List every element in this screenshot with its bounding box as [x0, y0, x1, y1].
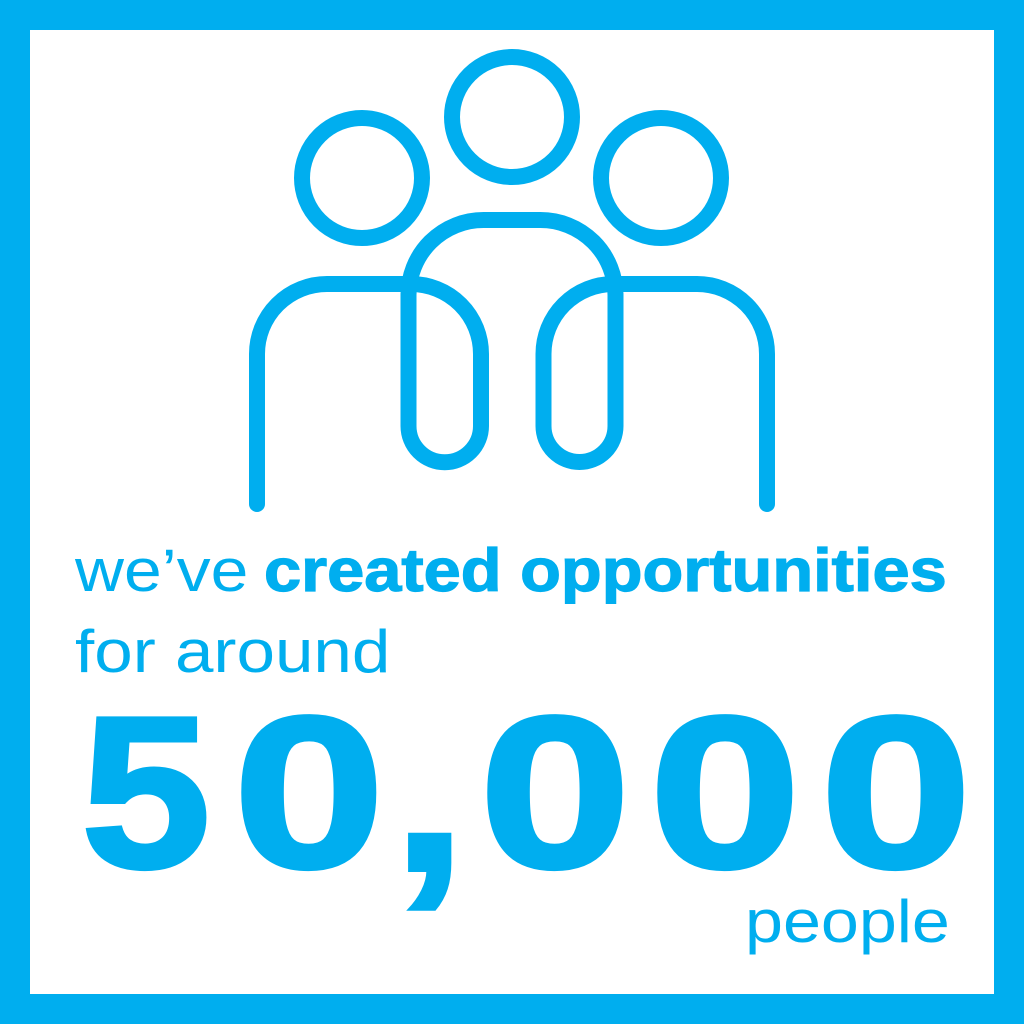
body: centre person [408, 220, 616, 295]
head: centre person [452, 57, 572, 177]
text: we've: we’ve [75, 537, 248, 604]
text: 50,000: 0 [232, 670, 384, 912]
text: for around: for around [75, 618, 390, 685]
text: created opportunities: created opportunities [264, 537, 947, 604]
head: right person [601, 118, 721, 238]
text: we've created opportunities [74, 537, 947, 604]
body: right person [544, 284, 767, 504]
text: 50,000: , [389, 645, 470, 924]
text: 50,000: 0 [820, 670, 971, 912]
text: 50,000 [81, 645, 971, 924]
text: 50,000: 0 [648, 670, 800, 912]
text: people: people [745, 888, 950, 955]
text: 50,000: 0 [478, 670, 630, 912]
body: left person [257, 284, 481, 504]
head: left person [302, 118, 422, 238]
text: 50,000: 5 [81, 670, 211, 912]
